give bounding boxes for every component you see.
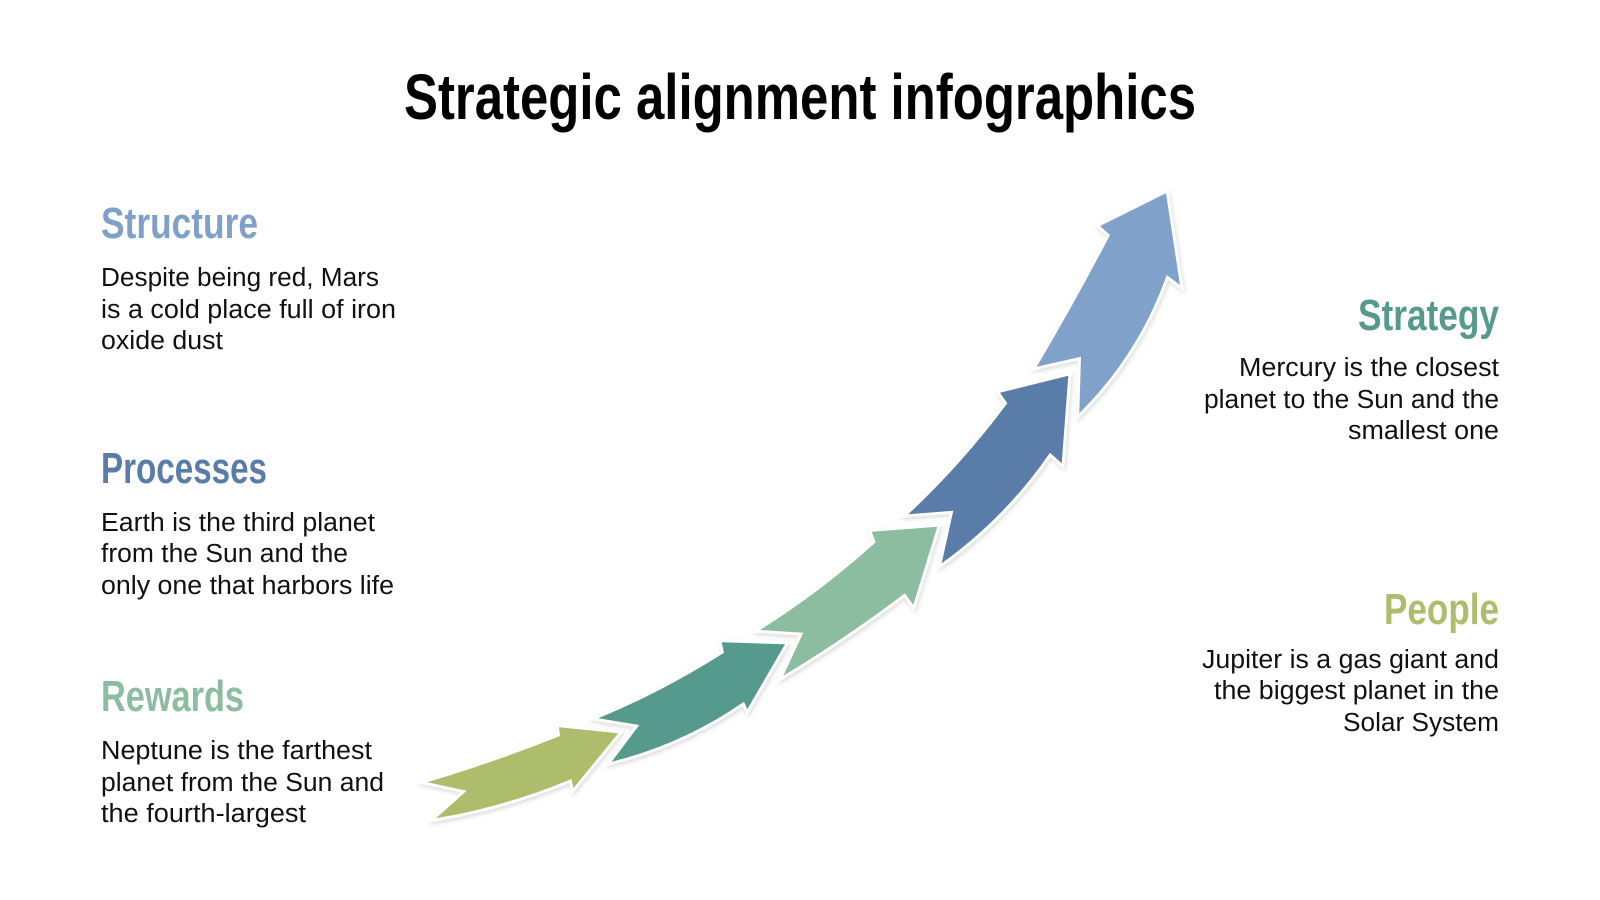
arrow: Processes (dark blue)	[908, 376, 1068, 563]
text: People description: Solar System	[1343, 709, 1499, 737]
text: Structure description: oxide dust	[101, 327, 223, 355]
text: Rewards description	[101, 737, 384, 828]
arrow: Rewards (sea green)	[760, 527, 937, 676]
text: Strategy description: smallest one	[1348, 417, 1499, 445]
text: Processes description: only one that harbors life	[101, 572, 394, 600]
block: Rewards	[101, 672, 384, 828]
chart: rising chain of five curved arrows	[427, 193, 1180, 818]
block: People	[1202, 585, 1499, 737]
title: Strategic alignment infographics	[404, 61, 1196, 133]
text: People description	[1202, 646, 1499, 737]
heading: Processes: Processes	[101, 444, 267, 493]
arrow: Strategy (teal)	[598, 642, 785, 762]
text: Processes description: from the Sun and the	[101, 540, 348, 568]
text: Processes description: Earth is the third planet	[101, 509, 375, 537]
heading: Strategy: Strategy	[1358, 291, 1499, 340]
heading: Rewards: Rewards	[101, 672, 244, 721]
block: Strategy	[1204, 291, 1499, 445]
text: Structure description	[101, 264, 396, 355]
text: People description: Jupiter is a gas giant and	[1202, 646, 1499, 674]
text: Strategy description: planet to the Sun and the	[1204, 386, 1499, 414]
text: Strategy description: Mercury is the closest	[1239, 354, 1499, 382]
arrow: People (olive)	[427, 727, 618, 818]
text: Strategy description	[1204, 354, 1499, 445]
text: Rewards description: Neptune is the farthest	[101, 737, 372, 765]
text: Structure description: is a cold place full of iron	[101, 296, 396, 324]
text: Rewards description: the fourth-largest	[101, 800, 306, 828]
heading: People: People	[1384, 585, 1499, 634]
text: Structure description: Despite being red, Mars	[101, 264, 379, 292]
text: People description: the biggest planet in the	[1214, 677, 1499, 705]
block: Structure	[101, 199, 396, 355]
block: Processes	[101, 444, 394, 600]
arrow: Structure (light blue)	[1037, 193, 1180, 413]
text: Rewards description: planet from the Sun and	[101, 769, 384, 797]
text: Processes description	[101, 509, 394, 600]
heading: Structure: Structure	[101, 199, 258, 248]
